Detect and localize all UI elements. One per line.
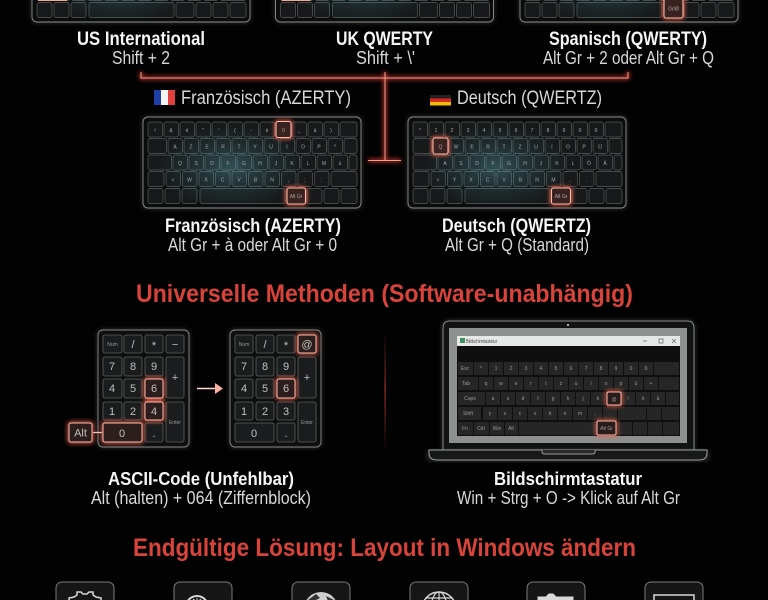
numpad: right: Enter [301, 420, 313, 426]
section heading: Endgültige Lösung: Endgültige Lösung: Layout in Windows ändern [133, 534, 636, 562]
numpad: right: . [284, 428, 288, 440]
panel: UK QWERTY [276, 0, 494, 68]
numpad: right: 7 [241, 361, 247, 373]
numpad: left: 5 [130, 383, 136, 395]
icon: region clock [174, 582, 232, 600]
numpad: right: 9 [283, 361, 289, 373]
layout title: Französisch: Französisch (AZERTY) [181, 88, 351, 109]
panel: ASCII-Code [69, 330, 321, 508]
numpad: right: 3 [283, 406, 289, 418]
numpad: right [230, 330, 321, 447]
panel: US International [32, 0, 250, 68]
keyboard: AZERTY: 0 [282, 128, 285, 134]
heading: US International: US International [77, 29, 205, 50]
shortcut: Französisch: Alt Gr + à oder Alt Gr + 0 [168, 235, 337, 255]
icon: monitor [645, 582, 703, 600]
keyboard: QWERTZ: Alt Gr [555, 194, 568, 200]
numpad: right: / [263, 339, 267, 351]
keyboard: UK QWERTY [276, 0, 494, 23]
heading: UK QWERTY: UK QWERTY [336, 29, 433, 50]
numpad: right: * [284, 340, 289, 352]
numpad: right: 0 [251, 428, 257, 440]
divider [384, 330, 386, 452]
heading: Französisch: Französisch (AZERTY) [165, 216, 341, 237]
keyboard: US International [32, 0, 250, 23]
numpad: left: 6 [151, 383, 157, 395]
laptop with on-screen keyboard: Alt [508, 426, 515, 432]
keyboard: QWERTZ: Q [439, 144, 443, 150]
laptop with on-screen keyboard: Alt Gr [600, 426, 613, 432]
icon: language globe [410, 582, 468, 600]
numpad: left: . [152, 428, 156, 440]
key: Alt: Alt [74, 428, 87, 440]
numpad: right: 5 [262, 383, 268, 395]
key: Alt [69, 423, 102, 442]
panel: Deutsch QWERTZ [408, 88, 626, 255]
heading: Deutsch: Deutsch (QWERTZ) [442, 216, 591, 237]
keyboard: AZERTY [143, 117, 361, 209]
heading: ASCII-Code: ASCII-Code (Unfehlbar) [108, 469, 294, 489]
keyboard: AZERTY: AZERTYUIOP^ [173, 144, 337, 150]
numpad: left: 2 [130, 406, 136, 418]
keyboard: Spanisch QWERTY [520, 0, 738, 23]
keyboard: QWERTZ: <YXCVBNM,. [437, 178, 587, 184]
shortcut: ASCII-Code: Alt (halten) + 064 (Ziffernblock) [91, 488, 311, 508]
icon: earth globe [292, 582, 350, 600]
numpad: left: 4 [109, 383, 115, 395]
heading: Spanisch QWERTY: Spanisch (QWERTY) [549, 29, 707, 50]
laptop with on-screen keyboard: Ctrl [477, 426, 485, 432]
numpad: left: Num [107, 342, 118, 348]
flag: France [154, 90, 175, 105]
arrow: numpad sequence [197, 383, 223, 394]
numpad: left: Enter [169, 420, 181, 426]
numpad: left: 8 [130, 361, 136, 373]
icon: keyboard settings folder [527, 582, 585, 600]
numpad: right: 6 [283, 383, 289, 395]
keyboard: AZERTY: <WXCVBN,;: [172, 178, 322, 184]
laptop with on-screen keyboard: Fn [462, 426, 468, 432]
icon row: Windows steps [56, 582, 703, 600]
panel: Bildschirmtastatur [428, 321, 708, 508]
shortcut: Spanisch QWERTY: Alt Gr + 2 oder Alt Gr + Q [543, 48, 714, 68]
laptop with on-screen keyboard: asdfghjklöä [492, 396, 660, 402]
laptop with on-screen keyboard: ^1234567890ß [480, 366, 648, 372]
laptop with on-screen keyboard: Shift [463, 411, 474, 417]
connector bracket [141, 72, 628, 160]
flag: Germany [430, 95, 451, 106]
numpad: left: / [131, 339, 135, 351]
numpad: left: 0 [119, 428, 125, 440]
keyboard: QWERTZ [408, 117, 626, 209]
laptop with on-screen keyboard: yxcvbnm,. [489, 411, 611, 417]
panel: Spanisch QWERTY [520, 0, 738, 68]
laptop with on-screen keyboard: @ [611, 397, 617, 403]
numpad: left: + [172, 372, 178, 384]
laptop with on-screen keyboard: Win [493, 426, 502, 432]
keyboard: AZERTY: QSDFGHJKLMù [178, 161, 342, 167]
laptop with on-screen keyboard: qwertzuiopü+ [485, 381, 653, 387]
numpad: left: − [172, 339, 178, 351]
keyboard: QWERTZ: ^1234567890ß [419, 128, 598, 134]
shortcut: UK QWERTY: Shift + \' [356, 48, 415, 68]
shortcut: US International: Shift + 2 [112, 48, 170, 68]
keyboard: Spanisch QWERTY: Dr/Ø [668, 6, 679, 12]
keyboard: QWERTZ: WERTZUIOPÜ [454, 144, 602, 150]
panel: Französisch AZERTY [143, 88, 361, 255]
numpad: left: 7 [109, 361, 115, 373]
section heading: Universelle Methoden: Universelle Methoden (Software-unabhängig) [136, 280, 633, 308]
numpad: left: 1 [109, 406, 115, 418]
numpad: right: + [304, 372, 310, 384]
numpad: left [98, 330, 189, 447]
numpad: left: 9 [151, 361, 157, 373]
laptop with on-screen keyboard: Esc [461, 366, 470, 372]
laptop with on-screen keyboard [428, 321, 708, 461]
numpad: right: @ [301, 339, 313, 351]
keyboard: AZERTY: ²&é"'(-è_à) [154, 128, 332, 134]
numpad: left: 4 [151, 406, 157, 418]
heading: Bildschirmtastatur: Bildschirmtastatur [494, 469, 642, 489]
numpad: right: 2 [262, 406, 268, 418]
laptop with on-screen keyboard: Bildschirmtastatur [466, 339, 497, 345]
numpad: right: Num [239, 342, 249, 348]
numpad: right: 8 [262, 361, 268, 373]
layout title: Deutsch: Deutsch (QWERTZ) [457, 88, 602, 109]
numpad: left: * [152, 340, 157, 352]
shortcut: Bildschirmtastatur: Win + Strg + O -> Klick auf Alt Gr [457, 488, 680, 508]
laptop with on-screen keyboard: Tab [462, 381, 470, 387]
icon: settings gear [56, 582, 114, 600]
numpad: right: 1 [241, 406, 247, 418]
laptop with on-screen keyboard: Caps [464, 396, 476, 402]
keyboard: QWERTZ: ASDFGHJKLÖÄ [443, 160, 607, 167]
shortcut: Deutsch: Alt Gr + Q (Standard) [445, 235, 589, 255]
keyboard: AZERTY: Alt Gr [290, 194, 303, 200]
numpad: right: 4 [241, 383, 247, 395]
